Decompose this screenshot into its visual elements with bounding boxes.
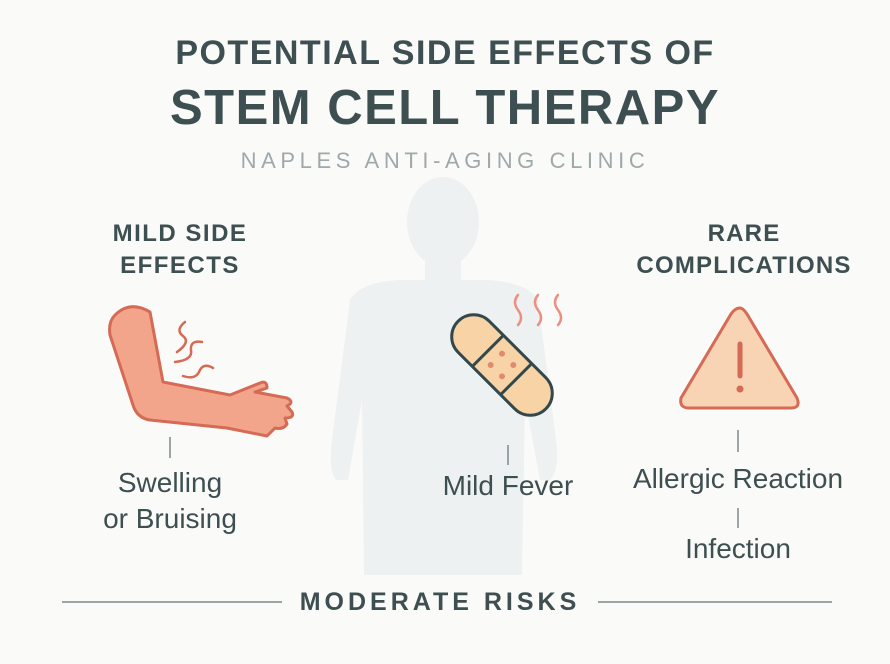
- heading: mild: MILD SIDE: [113, 220, 247, 247]
- icon: arm: [108, 305, 294, 438]
- heading: mild: [113, 220, 247, 279]
- label: swelling: or Bruising: [103, 503, 237, 534]
- label: swelling: Swelling: [118, 467, 222, 498]
- label: swelling: [103, 467, 237, 534]
- footer heading: MODERATE RISKS: [300, 588, 580, 616]
- icon: bandage: [450, 294, 562, 417]
- icon: warning triangle: [679, 306, 800, 410]
- heading: rare: [636, 220, 852, 279]
- heading: rare: COMPLICATIONS: [636, 252, 852, 279]
- label: allergic: Allergic Reaction: [633, 463, 843, 494]
- label: infection: Infection: [685, 533, 791, 564]
- subtitle: NAPLES ANTI-AGING CLINIC: [241, 148, 649, 173]
- title main: STEM CELL THERAPY: [170, 81, 720, 135]
- heading: rare: RARE: [708, 220, 780, 247]
- title: POTENTIAL SIDE EFFECTS OF: [175, 34, 715, 72]
- heading: mild: EFFECTS: [120, 252, 240, 279]
- label: fever: Mild Fever: [443, 470, 573, 501]
